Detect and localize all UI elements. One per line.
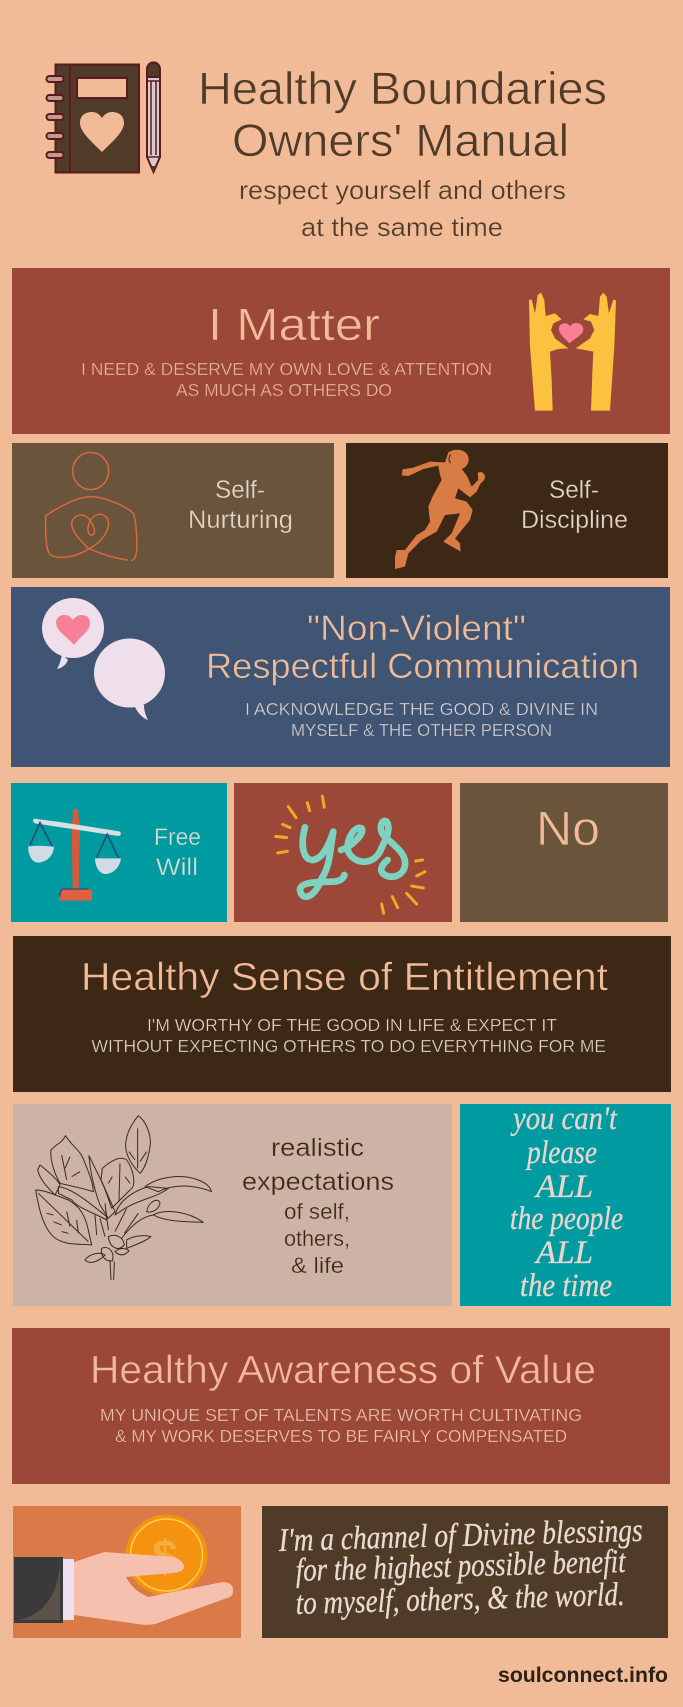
label: Self-Nurturing bbox=[188, 476, 293, 534]
subtitle: at the same time bbox=[301, 212, 503, 242]
title: Healthy Boundaries bbox=[198, 63, 607, 114]
panel: I Matter bbox=[12, 268, 670, 434]
text: I acknowledge: MYSELF & THE OTHER PERSON bbox=[291, 720, 552, 740]
label: realistic expectations: of self, bbox=[284, 1199, 350, 1224]
quote text: the people bbox=[510, 1201, 623, 1237]
icon: running woman bbox=[395, 450, 485, 569]
panel: realistic expectations bbox=[13, 1104, 452, 1306]
heading: I Matter: I Matter bbox=[208, 299, 380, 350]
label: Free Will: Will bbox=[156, 854, 198, 881]
panel: Healthy Sense of Entitlement bbox=[13, 936, 671, 1092]
panel: Healthy Awareness of Value bbox=[12, 1328, 670, 1484]
panel: yes bbox=[234, 783, 452, 922]
quote text: you can't bbox=[510, 1101, 618, 1137]
quote text bbox=[277, 1513, 643, 1622]
header bbox=[46, 62, 607, 242]
icon: yes lettering bbox=[276, 796, 425, 913]
text: I need and deserve bbox=[81, 359, 492, 400]
text: unique set of talents: & MY WORK DESERVES TO BE FAIRLY COMPENSATED bbox=[115, 1426, 567, 1446]
label: Self-Discipline: Self- bbox=[549, 476, 599, 504]
label: realistic expectations: realistic bbox=[271, 1134, 364, 1162]
panel: Divine blessings quote bbox=[262, 1506, 668, 1638]
label: Free Will: Free bbox=[154, 824, 201, 851]
quote text: please bbox=[525, 1135, 597, 1171]
panel: hand with coin bbox=[13, 1506, 241, 1638]
quote text: ALL bbox=[534, 1169, 593, 1205]
text: unique set of talents: MY UNIQUE SET OF TALENTS ARE WORTH CULTIVATING bbox=[100, 1405, 582, 1425]
icon: speech bubbles bbox=[42, 598, 165, 720]
panel: Free Will bbox=[11, 783, 227, 922]
heading: Healthy Sense of Entitlement: Healthy Sense of Entitlement bbox=[81, 956, 608, 999]
panel: No bbox=[460, 783, 668, 922]
subtitle bbox=[239, 175, 566, 242]
label: No: No bbox=[536, 803, 600, 856]
heading: Non-Violent Respectful Communication: Respectful Communication bbox=[206, 647, 639, 686]
text: worthy of the good: I'M WORTHY OF THE GOOD IN LIFE & EXPECT IT bbox=[147, 1015, 557, 1035]
footer: website: soulconnect.info bbox=[498, 1664, 668, 1687]
label: realistic expectations bbox=[242, 1134, 394, 1278]
title: Owners' Manual bbox=[232, 115, 569, 166]
quote text: ALL bbox=[534, 1235, 593, 1271]
panel: you can't please all bbox=[460, 1101, 671, 1306]
icon: notebook with heart bbox=[46, 62, 160, 172]
icon: hand and sleeve bbox=[14, 1552, 233, 1625]
icon: coin: $ bbox=[152, 1530, 178, 1582]
text: I acknowledge bbox=[245, 699, 598, 740]
icon: hands forming heart bbox=[529, 293, 616, 411]
text: I need and deserve: I NEED & DESERVE MY OWN LOVE & ATTENTION bbox=[81, 359, 492, 379]
text: I need and deserve: AS MUCH AS OTHERS DO bbox=[176, 380, 392, 400]
text: unique set of talents bbox=[100, 1405, 582, 1446]
label: Self-Discipline: Discipline bbox=[521, 506, 628, 534]
icon: plant line drawing bbox=[36, 1116, 212, 1280]
subtitle: respect yourself and others bbox=[239, 175, 566, 205]
text: worthy of the good bbox=[92, 1015, 606, 1056]
panel: Self-Nurturing bbox=[12, 443, 334, 578]
label: Free Will bbox=[154, 824, 201, 881]
title bbox=[198, 63, 607, 166]
label: realistic expectations: others, bbox=[284, 1226, 350, 1251]
heading: Non-Violent Respectful Communication: "Non-Violent" bbox=[307, 609, 526, 648]
text: I acknowledge: I ACKNOWLEDGE THE GOOD & DIVINE IN bbox=[245, 699, 598, 719]
panel: Respectful Communication bbox=[11, 587, 670, 767]
label: realistic expectations: & life bbox=[291, 1253, 344, 1278]
heading: Healthy Awareness of Value: Healthy Awareness of Value bbox=[90, 1349, 596, 1392]
label: realistic expectations: expectations bbox=[242, 1168, 394, 1196]
panel: Self-Discipline bbox=[346, 443, 668, 578]
icon: balance scale bbox=[28, 809, 121, 901]
label: Self-Discipline bbox=[521, 476, 628, 534]
icon: coin bbox=[126, 1514, 208, 1596]
label: Self-Nurturing: Self- bbox=[215, 476, 265, 504]
label: Self-Nurturing: Nurturing bbox=[188, 506, 293, 534]
icon: line figure with heart bbox=[46, 452, 137, 561]
text: worthy of the good: WITHOUT EXPECTING OTHERS TO DO EVERYTHING FOR ME bbox=[92, 1036, 606, 1056]
quote text bbox=[510, 1101, 623, 1304]
heading: Non-Violent Respectful Communication bbox=[206, 609, 639, 686]
quote text: the time bbox=[520, 1268, 612, 1304]
